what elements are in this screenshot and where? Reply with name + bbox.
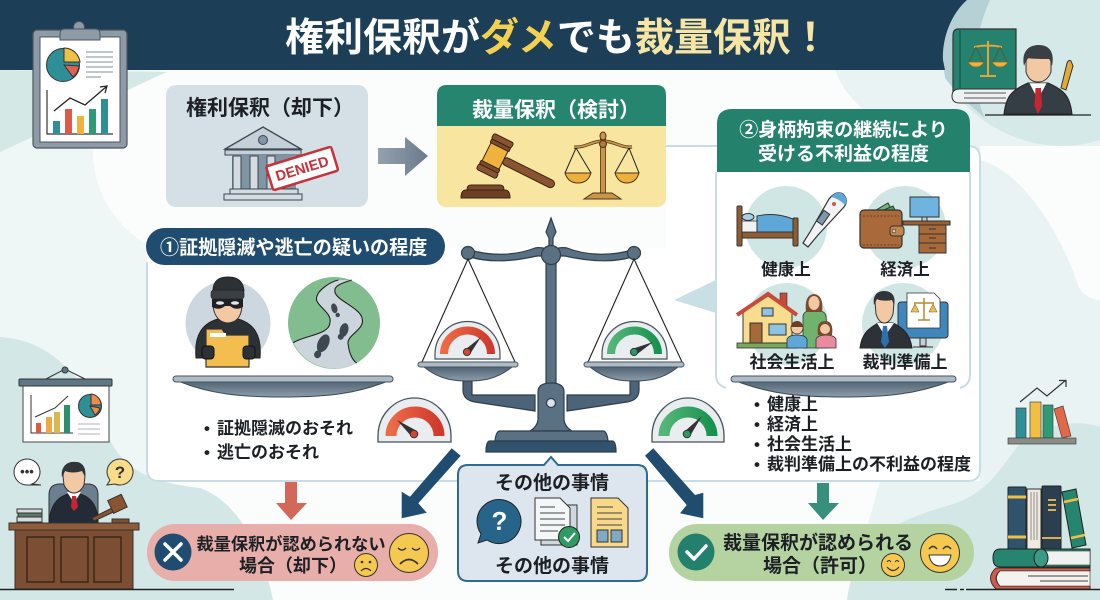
icon: wallet and desk bbox=[860, 186, 950, 268]
text block: left factors: • bbox=[204, 419, 210, 438]
law book bbox=[952, 29, 1016, 103]
result text: 裁量保釈が認められない bbox=[196, 534, 386, 554]
right pan with gauge bbox=[584, 259, 684, 381]
result text bbox=[723, 531, 913, 577]
icon: judge at bench bbox=[0, 459, 234, 590]
icon: check bbox=[678, 534, 714, 570]
panel: 権利保釈（却下） bbox=[166, 85, 368, 207]
result: 裁量保釈が認められない場合（却下） bbox=[147, 524, 438, 581]
icon: lawyer and monitor bbox=[860, 283, 948, 365]
right balance plate bbox=[731, 376, 956, 397]
icon: presentation board bbox=[19, 367, 112, 442]
arrow: scale to denied result bbox=[402, 448, 461, 518]
text block: right factors: • bbox=[754, 435, 760, 454]
arrow: right panel down bbox=[808, 483, 839, 520]
panel: その他の事情 bbox=[458, 457, 647, 581]
icon: small smile face bbox=[882, 554, 904, 576]
panel: ②身柄拘束の継続により受ける不利益の程度 bbox=[716, 109, 970, 388]
arrow pointer: right panel to scale bbox=[674, 280, 716, 313]
speech bubble: ••• bbox=[20, 464, 34, 479]
speech bubble bbox=[14, 459, 41, 485]
icon: question bubble: ? bbox=[492, 506, 507, 536]
icon: courthouse with DENIED stamp bbox=[224, 127, 338, 200]
label: 経済上: 経済上 bbox=[880, 260, 930, 279]
panel: 裁量保釈（検討） bbox=[437, 85, 666, 207]
text block: right factors: 経済上 bbox=[767, 415, 818, 434]
icon: cross bbox=[154, 534, 192, 570]
icon: balance scale bbox=[565, 132, 639, 199]
icon: documents with check bbox=[535, 498, 580, 548]
result text: 裁量保釈が認められる bbox=[723, 531, 913, 554]
panel header: ②身柄拘束の継続により bbox=[739, 119, 948, 141]
icon: question bubble bbox=[477, 500, 521, 544]
icon: law book and lawyer bbox=[952, 29, 1091, 115]
arrow: scale to granted result bbox=[645, 448, 703, 518]
scale post and base bbox=[463, 262, 639, 452]
icon: clipboard report bbox=[33, 22, 127, 148]
text block: left factors: 証拠隠滅のおそれ bbox=[217, 419, 353, 438]
question bubble: ? bbox=[115, 463, 125, 482]
icon: thief with folder bbox=[186, 277, 270, 367]
arrow: left panel down bbox=[276, 482, 307, 520]
text block: left factors: • bbox=[204, 443, 210, 462]
panel header bbox=[717, 109, 970, 172]
icon: gavel bbox=[461, 133, 563, 203]
icon: courthouse with DENIED stamp: DENIED bbox=[274, 154, 331, 185]
left balance plate bbox=[173, 376, 393, 397]
scale beam bbox=[462, 218, 640, 264]
icon: bed and thermometer bbox=[737, 186, 847, 268]
label: その他の事情: その他の事情 bbox=[495, 555, 609, 577]
text block: right factors: • bbox=[754, 395, 760, 414]
icon: escape road with footprints bbox=[288, 277, 380, 369]
text block: right factors: 社会生活上 bbox=[767, 435, 852, 454]
label: 健康上: 健康上 bbox=[761, 260, 811, 279]
left pan with gauge bbox=[418, 259, 518, 381]
label: 社会生活上: 社会生活上 bbox=[750, 353, 834, 372]
question bubble bbox=[107, 459, 133, 485]
text block: left factors bbox=[204, 419, 353, 462]
icon: big smile face bbox=[920, 534, 960, 572]
result: 裁量保釈が認められる場合（許可） bbox=[669, 524, 974, 581]
icon: big sad face bbox=[390, 534, 428, 572]
chart: central balance scale bbox=[418, 218, 684, 452]
result text: 場合（却下） bbox=[239, 556, 347, 576]
text block: left factors: 逃亡のおそれ bbox=[217, 443, 319, 462]
gauge: high risk bbox=[378, 398, 451, 442]
text block: right factors bbox=[754, 395, 971, 474]
result text bbox=[196, 534, 386, 576]
connector line bbox=[666, 145, 716, 147]
title text: 権利保釈がダメでも裁量保釈！ bbox=[285, 17, 830, 60]
text block: right factors: 健康上 bbox=[767, 395, 818, 414]
heading: 権利保釈（却下）: 権利保釈（却下） bbox=[186, 97, 354, 120]
text block: right factors: • bbox=[754, 415, 760, 434]
heading: 裁量保釈（検討）: 裁量保釈（検討） bbox=[472, 99, 640, 122]
icon: small sad face bbox=[354, 554, 378, 576]
heading: その他の事情: その他の事情 bbox=[495, 472, 609, 494]
title banner bbox=[0, 0, 967, 70]
panel header: 受ける不利益の程度 bbox=[758, 142, 929, 165]
lawyer bbox=[985, 45, 1091, 115]
heading pill: ①証拠隠滅や逃亡の疑いの程度: ①証拠隠滅や逃亡の疑いの程度 bbox=[160, 236, 427, 259]
text block: right factors: • bbox=[754, 455, 760, 474]
result text: 場合（許可） bbox=[763, 554, 877, 577]
main panel outline bbox=[147, 146, 980, 481]
icon: stack of books bbox=[945, 486, 1100, 590]
icon: bar chart on shelf bbox=[1008, 380, 1076, 444]
text block: right factors: 裁判準備上の不利益の程度 bbox=[767, 454, 971, 474]
icon: house and family bbox=[737, 283, 836, 365]
heading pill: ①証拠隠滅や逃亡の疑いの程度 bbox=[146, 228, 445, 265]
arrow: 権利保釈 to 裁量保釈 bbox=[378, 137, 428, 176]
icon: yellow document bbox=[591, 498, 628, 547]
gauge: low risk bbox=[652, 398, 724, 442]
label: 裁判準備上: 裁判準備上 bbox=[862, 352, 948, 372]
